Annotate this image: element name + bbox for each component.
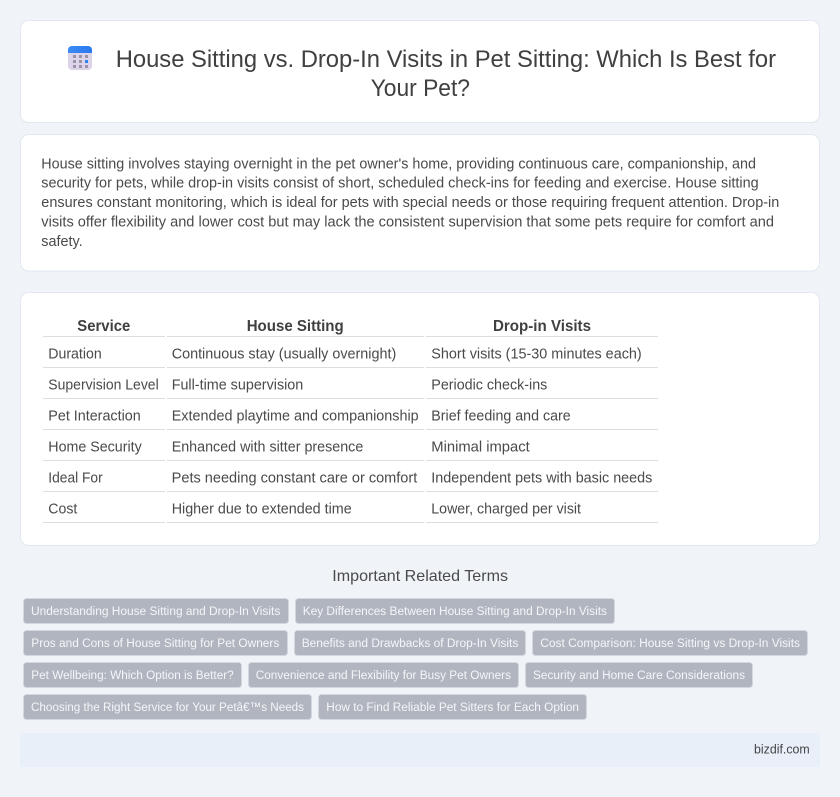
table row: home security: Enhanced with sitter presence [172, 439, 363, 455]
panel: title card [20, 20, 820, 122]
text block: summary: visits offer flexibility and lower cost but may lack the consistent supervision that some pets require for comfort and [41, 214, 774, 230]
footer bar: bizdif.com [754, 742, 810, 757]
table header row: Service [77, 318, 130, 335]
tag: cost comparison: Cost Comparison: House Sitting vs Drop-In Visits [540, 636, 800, 650]
text block: summary [41, 156, 779, 250]
tag: pros and cons: Pros and Cons of House Sitting for Pet Owners [31, 636, 279, 650]
table row: supervision level: Supervision Level [48, 377, 159, 393]
text block: summary: ensures constant monitoring, which is ideal for pets with special needs or those requiring frequent attention. Drop-in [41, 195, 779, 211]
tag: benefits and drawbacks: Benefits and Drawbacks of Drop-In Visits [302, 636, 518, 650]
related terms tags [24, 598, 808, 720]
heading: important related terms: Important Related Terms [332, 568, 508, 585]
table row: ideal for: Independent pets with basic needs [431, 470, 652, 486]
tag: convenience: Convenience and Flexibility for Busy Pet Owners [256, 668, 511, 682]
tag: how to find: How to Find Reliable Pet Sitters for Each Option [326, 700, 579, 714]
table row: duration [43, 346, 658, 368]
tag: security [526, 662, 752, 688]
table row: pet interaction: Pet Interaction [48, 408, 141, 424]
table header row: Drop-in Visits [493, 318, 591, 335]
table row: cost: Higher due to extended time [172, 501, 352, 517]
tag: security: Security and Home Care Considerations [533, 668, 745, 682]
tag: convenience [248, 662, 518, 688]
table row: pet interaction [43, 408, 658, 430]
table header row: House Sitting [247, 318, 344, 335]
footer bar [20, 733, 820, 767]
title [116, 46, 776, 102]
tag: pet wellbeing: Pet Wellbeing: Which Option is Better? [31, 668, 234, 682]
tag: key differences: Key Differences Between House Sitting and Drop-In Visits [303, 604, 607, 618]
table row: duration: Short visits (15-30 minutes each) [431, 346, 642, 362]
text block: summary: safety. [41, 234, 83, 250]
table row: ideal for [43, 470, 658, 492]
icon: calendar [68, 46, 92, 70]
table row: ideal for: Ideal For [48, 470, 103, 486]
table row: cost: Lower, charged per visit [431, 501, 581, 517]
title: House Sitting vs. Drop-In Visits in Pet Sitting: Which Is Best for [116, 46, 776, 73]
table row: duration: Duration [48, 346, 102, 362]
panel: comparison table [20, 292, 820, 546]
table row: duration: Continuous stay (usually overnight) [172, 346, 396, 362]
tag: understanding [24, 598, 288, 624]
table row: supervision level [43, 377, 658, 399]
text block: summary: security for pets, while drop-in visits consist of short, scheduled check-ins for feeding and exercise. House sitting [41, 176, 759, 192]
table row: home security: Minimal impact [431, 439, 530, 455]
tag: how to find [318, 694, 586, 720]
panel: summary paragraph [20, 134, 820, 271]
table row: pet interaction: Extended playtime and companionship [172, 408, 419, 424]
table row: supervision level: Full-time supervision [172, 377, 303, 393]
tag: choosing: Choosing the Right Service for Your Petâ€™s Needs [31, 700, 304, 714]
table header row [43, 318, 658, 337]
table row: cost [43, 501, 658, 523]
table row: pet interaction: Brief feeding and care [431, 408, 571, 424]
tag: pet wellbeing [24, 662, 242, 688]
tag: key differences [296, 598, 614, 624]
title: Your Pet? [371, 75, 470, 102]
table row: home security [43, 439, 658, 461]
tag: benefits and drawbacks [294, 630, 526, 656]
table row: cost: Cost [48, 501, 77, 517]
text block: summary: House sitting involves staying overnight in the pet owner's home, providing continuous care, companionship, and [41, 156, 756, 172]
table row: ideal for: Pets needing constant care or comfort [172, 470, 417, 486]
table row: home security: Home Security [48, 439, 142, 455]
tag: cost comparison [532, 630, 808, 656]
tag: choosing [24, 694, 312, 720]
table row: supervision level: Periodic check-ins [431, 377, 547, 393]
tag: pros and cons [24, 630, 288, 656]
tag: understanding: Understanding House Sitting and Drop-In Visits [31, 604, 280, 618]
